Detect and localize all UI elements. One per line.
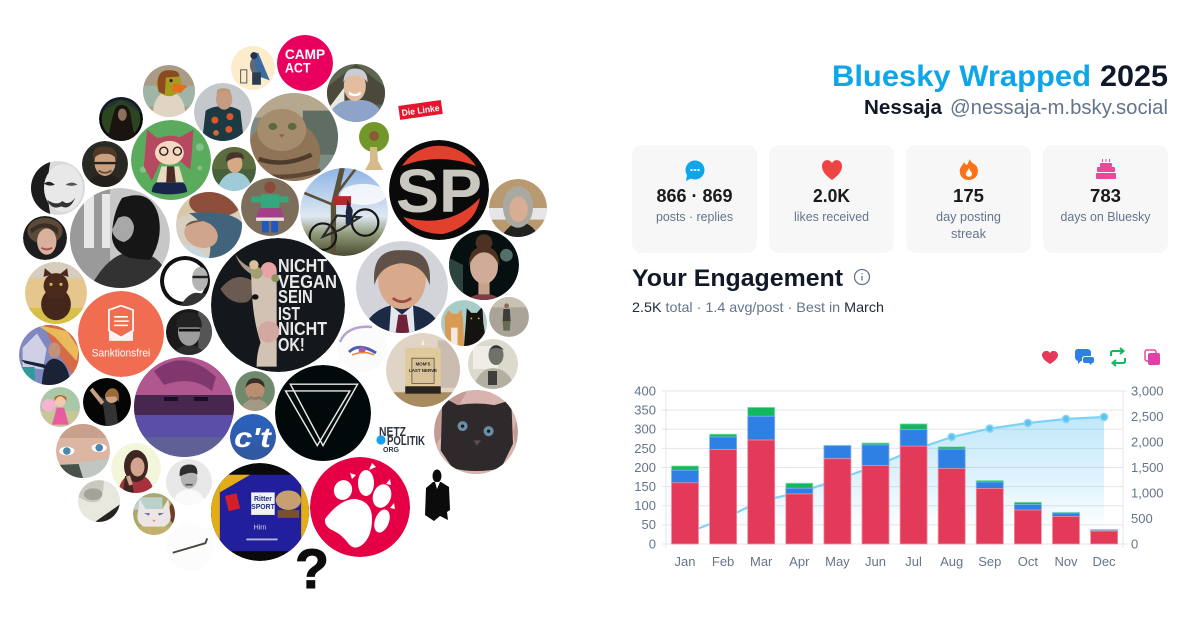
avatar: bearded man black and white xyxy=(70,188,170,288)
icon: birthday cake xyxy=(1096,159,1116,179)
avatar: man in beanie xyxy=(166,309,212,355)
left axis labels: 350 xyxy=(634,402,656,418)
title: Bluesky Wrapped 2025: Bluesky Wrapped xyxy=(832,60,1091,93)
left axis labels: 100 xyxy=(634,498,656,513)
icon: Netzpolitik logo: NETZ xyxy=(379,425,406,439)
avatar: batman with walker xyxy=(231,46,275,90)
left axis labels: 150 xyxy=(634,479,656,494)
panel: days on Bluesky: 783 xyxy=(1090,186,1121,206)
avatar: paw print xyxy=(310,457,410,557)
panel: day posting streak xyxy=(906,145,1031,253)
left axis labels: 300 xyxy=(634,422,656,436)
avatar: grey-haired woman xyxy=(489,179,547,237)
month labels: Apr xyxy=(789,554,810,569)
avatar: Camp Act logo xyxy=(277,35,333,91)
panel: likes received: likes received xyxy=(794,209,869,224)
avatar: cow with vegan slogan: SEIN xyxy=(278,287,313,307)
avatar: triangle emblem xyxy=(275,365,371,461)
avatar: Ritter Sport packaging xyxy=(211,463,309,561)
avatar: Camp Act logo: ACT xyxy=(285,61,311,76)
panel: day posting streak: 175 xyxy=(953,186,984,206)
avatar: man with unicorn xyxy=(19,325,79,385)
avatar: Guy Fawkes mask xyxy=(31,161,85,215)
month labels: Feb xyxy=(712,554,734,569)
right axis labels: 1,500 xyxy=(1131,460,1164,475)
cumulative area xyxy=(685,417,1104,544)
icon: replies legend bubbles xyxy=(1075,349,1094,365)
avatar: cow with vegan slogan xyxy=(211,238,345,372)
avatar: c't logo xyxy=(230,414,276,460)
avatar: cartoon in pink xyxy=(40,387,80,427)
right axis labels xyxy=(1131,384,1164,552)
icon: reposts legend arrows xyxy=(1111,348,1125,366)
chart: monthly engagement xyxy=(634,384,1164,569)
avatar: Sanktionsfrei logo xyxy=(78,291,164,377)
icon: info xyxy=(854,270,870,284)
month labels: May xyxy=(825,554,850,569)
avatar: woman with bi-flag overlay xyxy=(134,357,234,457)
chart legend xyxy=(1042,348,1160,366)
month labels: Mar xyxy=(750,554,773,569)
avatar: candle: LAST NERVE xyxy=(409,368,437,373)
month labels: Nov xyxy=(1054,554,1078,569)
month labels: Oct xyxy=(1018,554,1038,569)
right axis labels: 3,000 xyxy=(1131,384,1164,398)
panel: posts and replies xyxy=(632,145,757,253)
avatar: pink-haired chibi xyxy=(131,120,211,200)
icon: tree with beaver xyxy=(359,122,389,170)
icon: Netzpolitik logo: ORG xyxy=(383,447,400,454)
left axis labels xyxy=(634,384,656,552)
icon: speech bubble xyxy=(686,160,704,181)
avatar: cow with vegan slogan: OK! xyxy=(278,335,305,355)
avatar: candle xyxy=(386,333,460,407)
avatar: Ritter Sport packaging: Hirn xyxy=(254,525,266,532)
avatar: man in white t-shirt xyxy=(166,459,212,500)
avatar: white cat xyxy=(133,493,175,535)
avatar: cow with vegan slogan: VEGAN xyxy=(278,272,337,292)
panel: posts and replies: 866 · 869 xyxy=(656,186,732,206)
left axis labels: 50 xyxy=(642,517,656,532)
right axis labels: 500 xyxy=(1131,511,1153,526)
avatar: man with glasses xyxy=(82,141,128,187)
avatar: tabby cat xyxy=(250,93,338,181)
avatar: blue eyes with mask xyxy=(56,424,110,478)
avatar: bald man in black ring xyxy=(160,256,210,306)
avatar: woman with bob hair xyxy=(23,216,67,260)
avatar: perler bead figure xyxy=(241,178,299,236)
icon: likes legend heart xyxy=(1042,351,1058,364)
avatar: mountain biker xyxy=(300,168,388,256)
right axis labels: 0 xyxy=(1131,536,1138,552)
avatar: performer in black xyxy=(83,378,131,426)
left axis labels: 250 xyxy=(634,441,656,456)
month labels: Aug xyxy=(940,554,963,569)
icon: flame xyxy=(960,159,978,180)
icon: quotes legend squares xyxy=(1145,350,1160,365)
red bars xyxy=(672,440,1118,544)
avatar: man in floral shirt xyxy=(194,83,252,141)
avatar: Ritter Sport packaging: SPORT xyxy=(251,504,276,511)
avatar: woman on the beach xyxy=(489,297,529,337)
avatar: cow with vegan slogan: NICHT xyxy=(278,256,327,276)
avatar: SP logo xyxy=(389,140,489,240)
avatar: SP logo: SP xyxy=(396,157,482,225)
avatar: man in suit with tie xyxy=(356,241,448,333)
user name and handle: Nessaja xyxy=(864,97,943,119)
green bars xyxy=(672,407,1118,531)
avatar: sleeping man xyxy=(176,188,242,258)
avatar: woman dark portrait xyxy=(99,97,143,141)
avatar cluster xyxy=(19,35,547,600)
panel: day posting streak: day posting xyxy=(936,209,1001,224)
left axis labels: 0 xyxy=(649,536,656,552)
avatar: woman with hair bun xyxy=(449,230,519,300)
icon: man in suit silhouette xyxy=(425,470,450,521)
avatar: painted black kitten xyxy=(25,262,87,324)
avatar: selfie in grey xyxy=(468,339,518,389)
icon: Die Linke logo: Die Linke xyxy=(401,103,440,118)
panel: posts and replies: posts · replies xyxy=(656,209,733,224)
right axis labels: 2,000 xyxy=(1131,434,1164,450)
panel: likes received xyxy=(769,145,894,253)
month labels: Jan xyxy=(675,554,695,569)
icon: Netzpolitik logo: POLITIK xyxy=(387,434,425,448)
icon: question mark: ? xyxy=(295,537,329,600)
user name and handle: @nessaja-m.bsky.social xyxy=(950,97,1168,119)
avatar: orange and black cats xyxy=(441,300,487,346)
avatar: monochrome neck shot xyxy=(78,480,120,522)
month labels: Dec xyxy=(1092,554,1116,569)
month labels xyxy=(675,554,1116,569)
avatar: c't logo: c't xyxy=(234,422,273,453)
avatar: candle: MOM'S xyxy=(416,362,430,367)
left axis labels: 400 xyxy=(634,384,656,398)
month labels: Sep xyxy=(978,554,1001,569)
avatar: crowbar on white xyxy=(172,538,208,554)
month labels: Jul xyxy=(905,554,922,569)
avatar: smiling older man xyxy=(327,64,385,122)
avatar: cow with vegan slogan: IST xyxy=(278,304,300,324)
avatar: man looking right xyxy=(212,147,256,191)
avatar: Camp Act logo: CAMP xyxy=(285,47,325,62)
right axis labels: 1,000 xyxy=(1131,486,1164,500)
avatar: Ritter Sport packaging: Ritter xyxy=(254,496,272,503)
cumulative points xyxy=(948,413,1108,441)
icon: heart xyxy=(822,160,842,180)
panel: day posting streak: streak xyxy=(951,226,986,241)
right axis labels: 2,500 xyxy=(1131,409,1164,424)
avatar: rubber duck xyxy=(143,65,195,117)
avatar: grey-bearded man smiling xyxy=(235,371,275,411)
blue bars xyxy=(672,416,1118,531)
avatar: woman on the phone xyxy=(111,443,161,493)
heading: Your Engagement: Your Engagement xyxy=(632,265,843,292)
panel: days on Bluesky xyxy=(1043,145,1168,253)
avatar: Sanktionsfrei logo: Sanktionsfrei xyxy=(92,347,150,359)
avatar: cow with vegan slogan: NICHT xyxy=(278,319,327,339)
icon: Netzpolitik logo xyxy=(376,425,425,454)
engagement summary line: 2.5K total · 1.4 avg/post · Best in March xyxy=(632,299,884,315)
month labels: Jun xyxy=(865,554,886,569)
avatar: black kitten with blue eyes xyxy=(434,390,518,474)
panel: likes received: 2.0K xyxy=(813,186,850,206)
panel: days on Bluesky: days on Bluesky xyxy=(1060,209,1151,224)
avatar: colourful eye sketch xyxy=(337,322,387,372)
left axis labels: 200 xyxy=(634,460,656,475)
chart grid xyxy=(662,391,1127,548)
cumulative line xyxy=(685,417,1104,534)
title: Bluesky Wrapped 2025: 2025 xyxy=(1100,60,1168,93)
